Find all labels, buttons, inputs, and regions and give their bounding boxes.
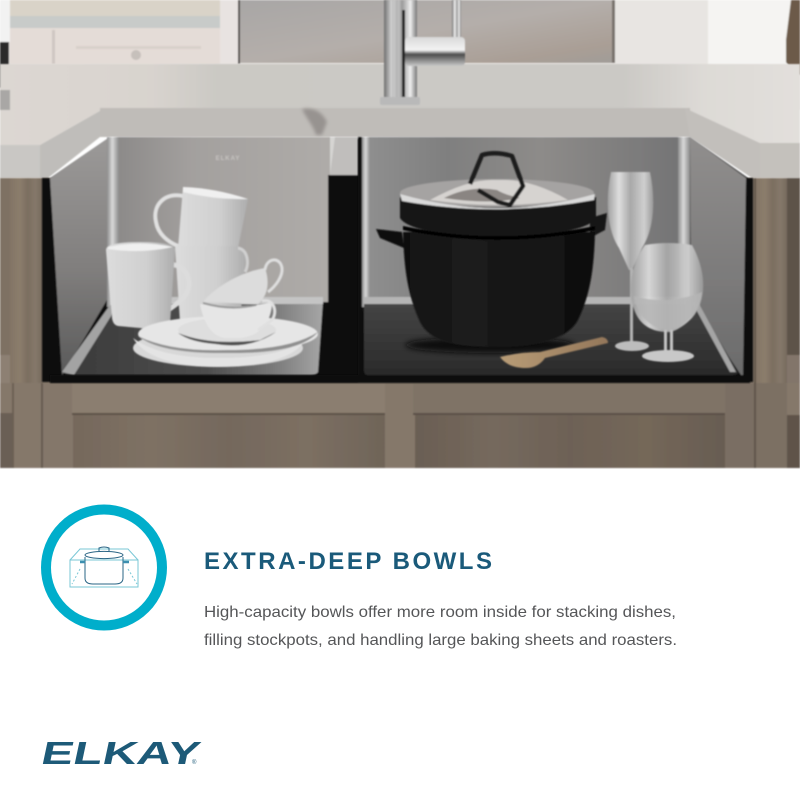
lid handle: [470, 153, 523, 205]
icon: deep bowl with stock pot: [46, 510, 162, 626]
handles: [376, 229, 404, 248]
glass: snifter: [631, 243, 703, 362]
wine glasses: [608, 172, 703, 362]
teacups: [200, 260, 282, 338]
sink logo: ELKAY: [216, 156, 240, 162]
heading: EXTRA-DEEP BOWLS: [204, 548, 492, 575]
sink: left bowl: [42, 137, 360, 382]
upper pot: [400, 197, 596, 236]
logo: Elkay: [38, 735, 204, 771]
icon box outline: [70, 549, 138, 587]
mugs and cups stack: [106, 187, 318, 367]
lid: [400, 179, 594, 207]
wooden spoon: [500, 337, 608, 368]
icon ring: [46, 510, 162, 626]
mug: top tilted: [155, 187, 248, 248]
body text: filling stockpots, and handling large baking sheets and roasters.: [204, 632, 677, 649]
plates: [133, 316, 318, 367]
logo: Elkay: ®: [192, 759, 197, 766]
mug: middle stacked: [175, 246, 247, 322]
counter front edges: [0, 145, 40, 178]
countertop: [0, 64, 800, 178]
pot shadow: [405, 337, 575, 353]
body text: High-capacity bowls offer more room inside for stacking dishes,: [204, 604, 676, 621]
lower pot: [403, 232, 595, 347]
photo: kitchen sink scene: [0, 0, 800, 468]
wood cabinets: [0, 178, 800, 468]
sink: right bowl: [50, 137, 753, 383]
glass: tall: [608, 172, 653, 351]
background kitchen: [0, 0, 800, 110]
stock pot with lid: [376, 153, 607, 347]
counter top surface: [0, 64, 800, 145]
logo: Elkay: ELKAY: [38, 735, 204, 771]
icon pot: [80, 547, 129, 584]
white info panel: [0, 469, 800, 800]
faucet: [380, 0, 465, 105]
mug: front: [106, 242, 189, 328]
body text: [204, 604, 677, 649]
